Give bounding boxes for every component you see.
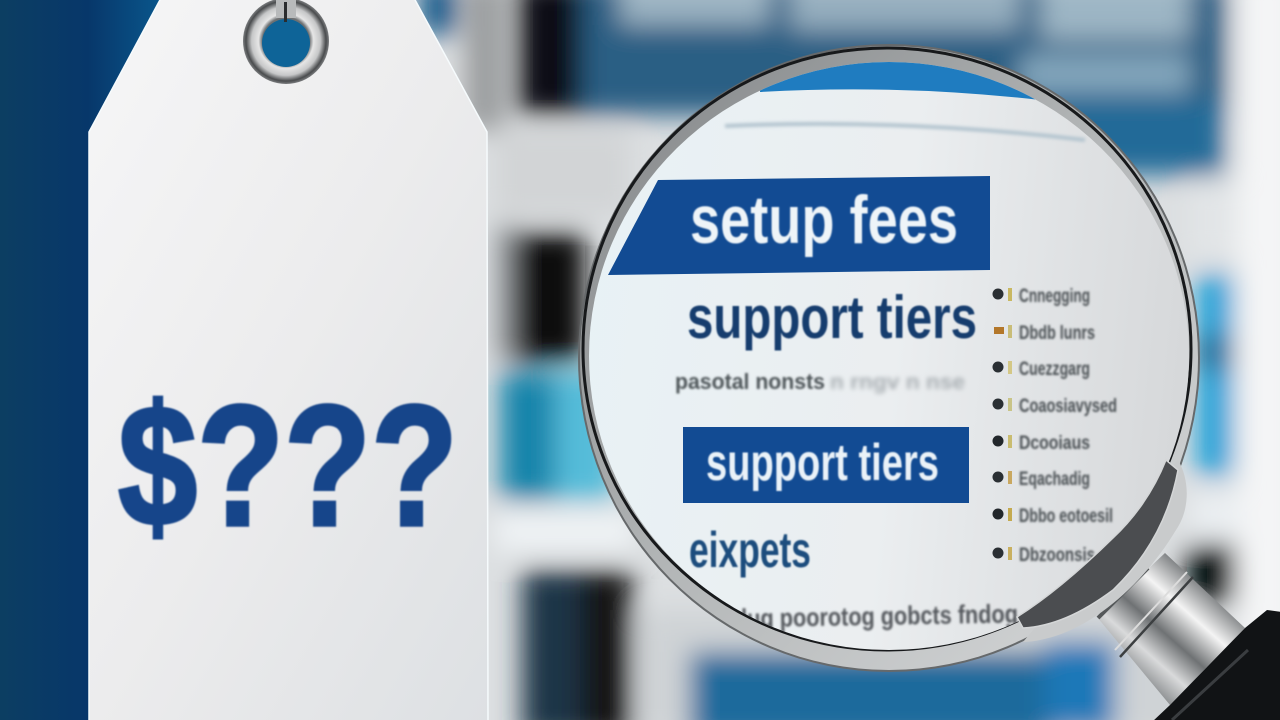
list item 1 [992,286,1090,307]
icon: metal eyelet [243,0,329,84]
list item 6 [992,469,1090,490]
list item 4: Coaosiavysed [1019,396,1117,417]
banner: setup fees: setup fees [690,182,958,258]
list item 5 [992,434,1091,450]
price tag [89,0,488,720]
list item 2 [994,324,1096,340]
list item 3 [992,359,1090,380]
list item 5: Dcooiaus [1019,433,1090,454]
banner: setup fees [608,176,990,275]
list item 6: Eqachadig [1019,469,1090,490]
list item 7: Dbbo eotoesil [1019,506,1113,527]
list item 4 [992,396,1117,417]
blurred caption [675,369,965,394]
unknown price label: $??? [118,370,458,562]
list item 8: Dbzoonsis [1019,545,1095,566]
blurred footnote: nlug poorotog gobcts fndog [728,598,1018,633]
list item 3: Cuezzgarg [1019,359,1090,380]
tag body [89,0,488,720]
blurred caption: n rngv n nse [830,371,965,394]
list item 8 [992,546,1096,562]
list item 1: Cnnegging [1019,286,1090,307]
blue strip at top of lens [760,60,1040,100]
heading: support tiers: support tiers [687,284,977,351]
heading: experts: eixpets [689,522,811,578]
list item 7 [992,506,1114,524]
banner: support tiers: support tiers [706,434,939,492]
list item 2: Dbdb lunrs [1019,323,1095,344]
lens contents [589,62,1189,650]
dark lens crescent [1017,460,1178,628]
feature list [992,286,1117,566]
lens rim [578,44,1200,672]
blurred caption: pasotal nonsts [675,369,825,394]
icon: handle [1097,553,1280,720]
magnifying glass [570,40,1280,720]
banner: support tiers [683,427,969,503]
